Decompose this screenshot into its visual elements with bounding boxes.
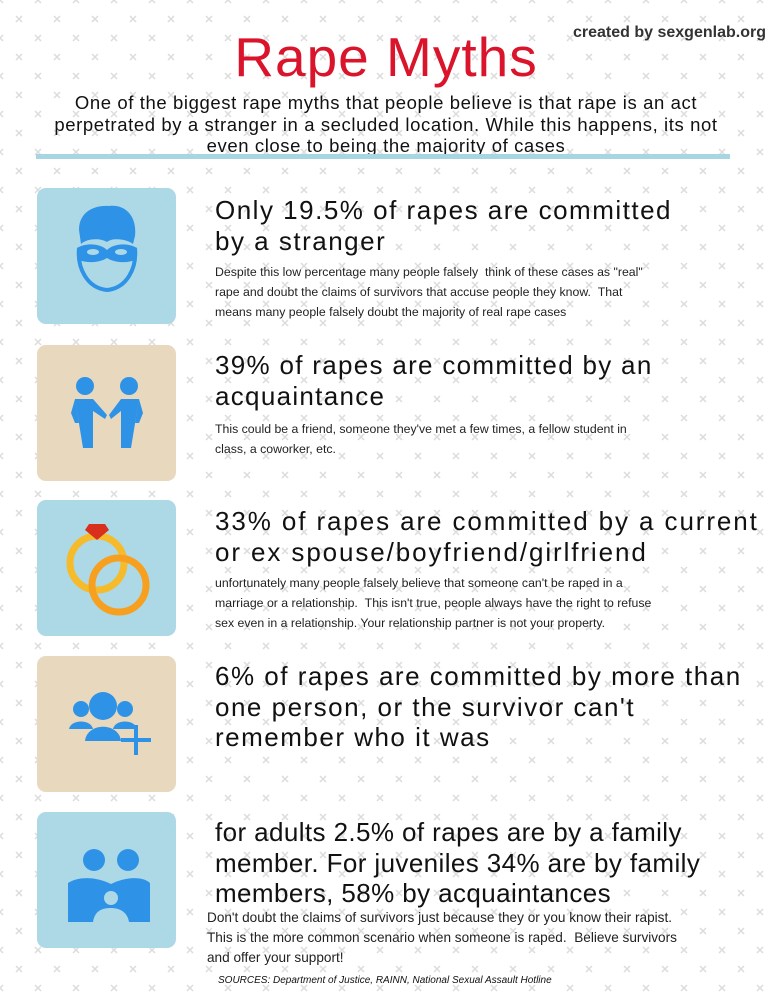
sources: SOURCES: Department of Justice, RAINN, National Sexual Assault Hotline [218, 975, 552, 986]
text: spouse [215, 576, 651, 630]
heading: stranger: by a stranger [215, 226, 386, 256]
text: spouse: marriage or a relationship. This isn't true, people always have the right to refuse [215, 596, 651, 610]
title: Rape Myths [234, 26, 538, 88]
heading: stranger: Only 19.5% of rapes are committed [215, 195, 672, 225]
heading: family [215, 817, 700, 908]
heading: family: members, 58% by acquaintances [215, 878, 611, 908]
text: acquaintance [215, 422, 627, 456]
heading: spouse: or ex spouse/boyfriend/girlfriend [215, 536, 648, 566]
text: stranger: rape and doubt the claims of survivors that accuse people they know. That [215, 285, 622, 299]
heading: family: member. For juveniles 34% are by family [215, 848, 700, 878]
intro text: One of the biggest rape myths that people believe is that rape is an act [75, 92, 697, 113]
heading: family: for adults 2.5% of rapes are by a family [215, 817, 682, 847]
text: stranger: Despite this low percentage many people falsely think of these cases as "real" [215, 265, 643, 279]
panel: spouse icon [37, 500, 176, 636]
text: family: and offer your support! [207, 950, 344, 965]
text: family: Don't doubt the claims of survivors just because they or you know their rapist. [207, 910, 672, 925]
heading: group: remember who it was [215, 722, 491, 752]
heading: acquaintance [215, 350, 653, 410]
panel: stranger icon [37, 188, 176, 324]
intro text: perpetrated by a stranger in a secluded location. While this happens, its not [54, 114, 718, 134]
heading: stranger [215, 195, 672, 256]
heading: acquaintance: acquaintance [215, 380, 385, 410]
text: stranger [215, 265, 643, 319]
intro text [54, 92, 718, 156]
intro text: even close to being the majority of cases [207, 135, 565, 156]
text: spouse: sex even in a relationship. Your relationship partner is not your property. [215, 616, 605, 630]
heading: group [215, 661, 742, 752]
text: acquaintance: class, a coworker, etc. [215, 442, 336, 456]
text: stranger: means many people falsely doubt the majority of real rape cases [215, 305, 566, 319]
panel: group icon [37, 656, 176, 792]
text: family: This is the more common scenario when someone is raped. Believe survivors [207, 930, 677, 945]
panel: family icon [37, 812, 176, 948]
divider [36, 154, 730, 159]
heading: group: one person, or the survivor can't [215, 692, 635, 722]
text: family [207, 910, 677, 965]
heading: acquaintance: 39% of rapes are committed by an [215, 350, 653, 380]
heading: group: 6% of rapes are committed by more than [215, 661, 742, 691]
heading: spouse: 33% of rapes are committed by a current [215, 506, 759, 536]
text: spouse: unfortunately many people falsely believe that someone can't be raped in a [215, 576, 623, 590]
heading: spouse [215, 506, 759, 566]
panel: acquaintance icon [37, 345, 176, 481]
text: acquaintance: This could be a friend, someone they've met a few times, a fellow student in [215, 422, 627, 436]
credit: created by sexgenlab.org [573, 24, 766, 41]
